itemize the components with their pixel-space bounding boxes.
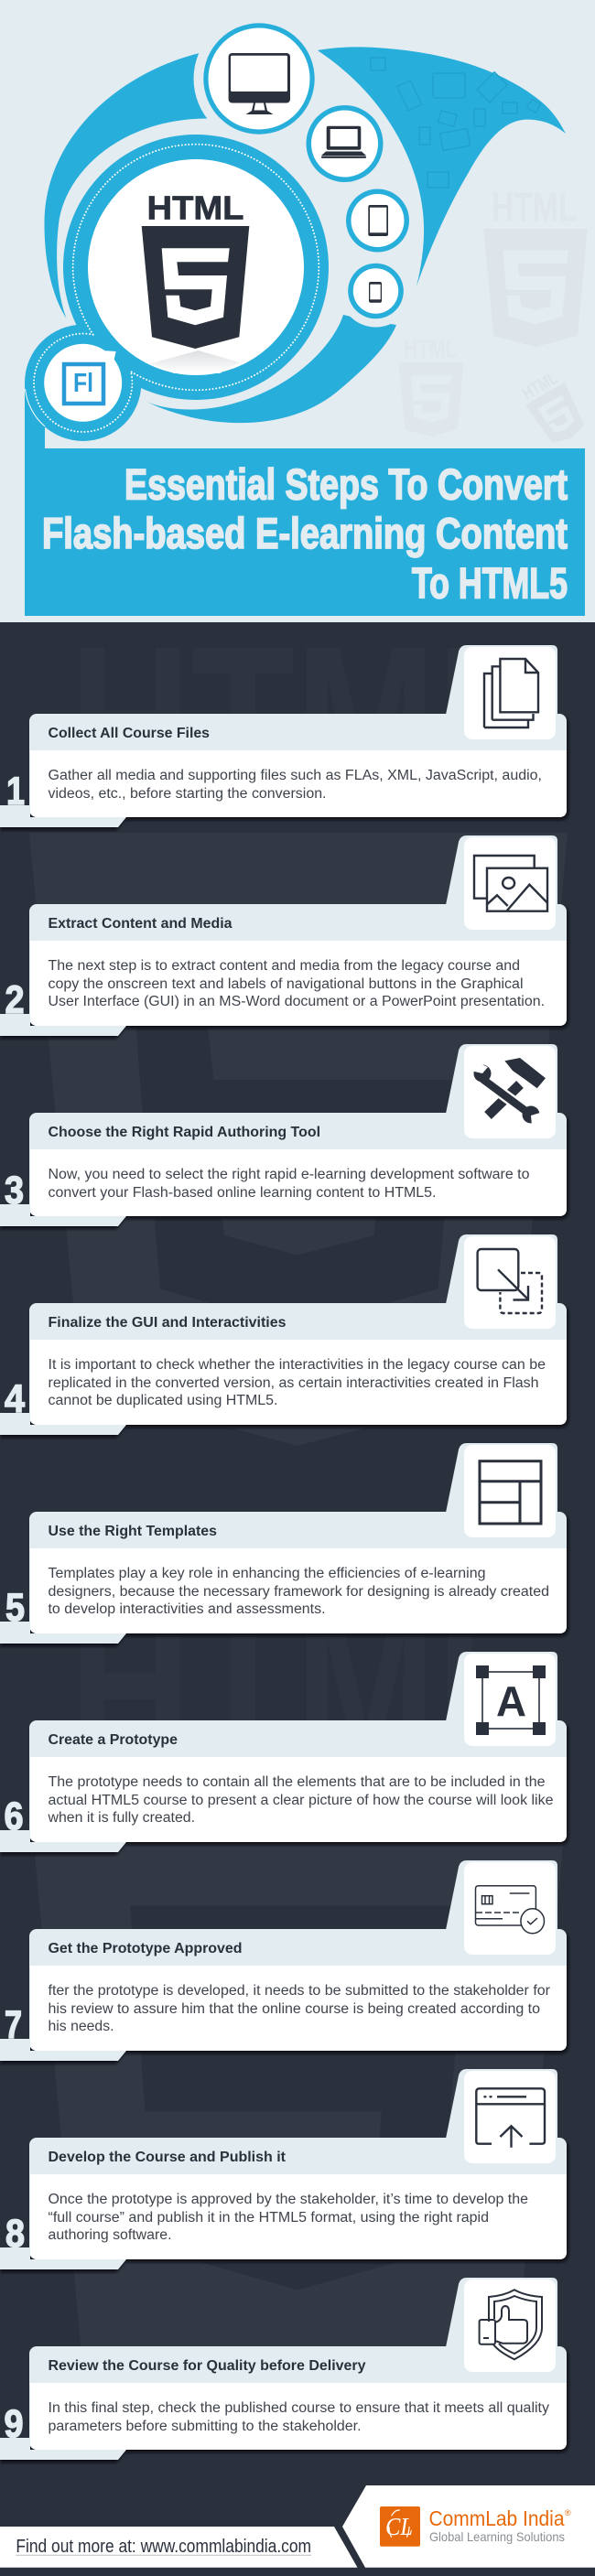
step body: fter the prototype is developed, it needs to be submitted to the stakeholder for: [48, 1983, 550, 1999]
footer link text: Find out more at: www.commlabindia.com: [16, 2537, 311, 2557]
step body: authoring software.: [48, 2227, 172, 2243]
step title: Finalize the GUI and Interactivities: [48, 1315, 286, 1331]
step number: 2: [5, 978, 24, 1022]
step body: designers, because the necessary framework for designing is already created: [48, 1584, 549, 1600]
icon: Flash logo: Fl: [73, 369, 93, 398]
step title: Use the Right Templates: [48, 1524, 217, 1539]
footer: find out more strip: [0, 2527, 357, 2568]
step body: cannot be duplicated using HTML5.: [48, 1393, 278, 1408]
registered mark: ®: [565, 2508, 571, 2517]
step 9 panel: [0, 2278, 568, 2463]
step body: “full course” and publish it in the HTML5 format, using the right rapid: [48, 2210, 489, 2226]
cut-out gaps around the device circles: [194, 13, 412, 328]
step body: In this final step, check the published course to ensure that it meets all quality: [48, 2400, 549, 2416]
swoosh: right sail with device pictograms: [318, 47, 566, 286]
icon: phone: [369, 282, 382, 303]
step title: Collect All Course Files: [48, 726, 210, 741]
circle: Flash icon: [25, 135, 329, 441]
icon: images: [474, 856, 547, 911]
step title: Choose the Right Rapid Authoring Tool: [48, 1125, 320, 1140]
watermark: tilted HTML5 logo: [516, 367, 590, 449]
step body: Now, you need to select the right rapid e-learning development software to: [48, 1167, 529, 1182]
icon: publish window: [476, 2088, 545, 2148]
step title: Develop the Course and Publish it: [48, 2150, 286, 2165]
step body: It is important to check whether the interactivities in the legacy course can be: [48, 1357, 546, 1373]
watermark: tilted HTML5 logo: HTML: [519, 369, 561, 404]
step 8 panel: [0, 2069, 568, 2272]
watermark: large HTML5 logo: [483, 185, 588, 347]
step body: [48, 768, 542, 802]
step number: 6: [4, 1795, 24, 1838]
step body: when it is fully created.: [47, 1810, 195, 1826]
logo tagline: Global Learning Solutions: [429, 2529, 565, 2544]
step number: 3: [5, 1169, 24, 1213]
step 7 panel: [0, 1860, 568, 2064]
icon: wrench and hammer: [471, 1058, 546, 1126]
step title: Get the Prototype Approved: [48, 1941, 242, 1956]
dark background watermark: shield upper: [29, 833, 568, 1446]
step 4 panel: [0, 1234, 568, 1438]
icon: stacked files: [484, 659, 538, 728]
icon: monitor: [229, 53, 290, 114]
logo wordmark: CommLab India: [428, 2506, 565, 2530]
icon: template layout: [480, 1461, 541, 1524]
watermark: medium HTML5 logo: HTML: [404, 335, 457, 363]
step body: Gather all media and supporting files such as FLAs, XML, JavaScript, audio,: [48, 768, 542, 783]
step number: 1: [6, 770, 25, 814]
step body: [48, 1983, 550, 2034]
step body: Once the prototype is approved by the stakeholder, it’s time to develop the: [48, 2192, 528, 2207]
step body: actual HTML5 course to present a clear picture of how the course will look like: [48, 1793, 553, 1808]
step title: Review the Course for Quality before Delivery: [48, 2358, 366, 2374]
step 3 panel: [0, 1044, 568, 1229]
step number: 8: [5, 2212, 25, 2256]
HTML5 shield: [142, 226, 249, 349]
step body: [48, 2192, 528, 2243]
logo reflection: [151, 350, 240, 373]
dotted ring around main circle: [73, 145, 319, 390]
step body: parameters before submitting to the stakeholder.: [48, 2419, 361, 2434]
step body: his review to assure him that the online course is being created according to: [48, 2001, 540, 2017]
logo mark: CL: [385, 2513, 413, 2540]
logo mark: [380, 2506, 420, 2547]
circle: desktop monitor: [203, 23, 315, 135]
icon: text box with handles: A: [496, 1677, 526, 1725]
icon: Flash logo: [64, 364, 103, 404]
icon: approved card: [476, 1886, 544, 1934]
step 1 panel: [0, 645, 568, 830]
step body: [48, 1167, 529, 1201]
step 5 panel: [0, 1443, 568, 1646]
step body: copy the onscreen text and labels of navigational buttons in the Graphical: [48, 976, 524, 992]
icon: move interaction: [478, 1249, 542, 1313]
circle: smartphone: [348, 264, 404, 318]
swoosh: left crescent: [44, 53, 229, 318]
dotted ring around Flash circle: [34, 334, 132, 432]
step body: his needs.: [48, 2019, 114, 2034]
step 2 panel: [0, 835, 568, 1039]
step number: 9: [4, 2402, 24, 2446]
step body: The prototype needs to contain all the elements that are to be included in the: [48, 1774, 546, 1790]
dark background watermark: shield lower: [29, 1795, 568, 2408]
step body: User Interface (GUI) in an MS-Word document or a PowerPoint presentation.: [48, 994, 545, 1009]
step 6 panel: [0, 1652, 568, 1855]
hero background panel: [0, 0, 595, 622]
step body: The next step is to extract content and media from the legacy course and: [48, 958, 520, 974]
step body: [48, 958, 545, 1009]
step body: convert your Flash-based online learning content to HTML5.: [48, 1185, 437, 1201]
step number: 7: [5, 2003, 22, 2047]
step body: replicated in the converted version, as certain interactivities created in Flash: [48, 1375, 538, 1391]
step body: [48, 1566, 549, 1617]
step body: [47, 1774, 554, 1826]
title banner: [25, 383, 585, 616]
icon: text box with handles: [476, 1665, 546, 1735]
HTML wordmark: HTML: [146, 189, 243, 226]
circle: tablet: [346, 189, 409, 253]
step number: 4: [5, 1377, 25, 1421]
step title: Extract Content and Media: [48, 916, 233, 932]
step number: 5: [5, 1586, 25, 1630]
watermark: medium HTML5 logo: [398, 335, 464, 437]
footer: CommLab India logo panel: [342, 2485, 595, 2568]
step title: Create a Prototype: [48, 1732, 178, 1748]
swoosh: bottom crescent: [146, 315, 396, 423]
step body: to develop interactivities and assessments.: [48, 1601, 326, 1617]
circle: laptop: [306, 105, 383, 182]
step body: videos, etc., before starting the conversion.: [48, 786, 326, 802]
step body: Templates play a key role in enhancing the efficiencies of e-learning: [48, 1566, 485, 1581]
step body: [48, 1357, 546, 1408]
icon: tablet: [368, 205, 388, 236]
icon: laptop: [321, 126, 366, 158]
step body: [48, 2400, 549, 2434]
circle: HTML5 logo: [73, 145, 319, 390]
icon: shield with thumbs up: [480, 2290, 542, 2359]
